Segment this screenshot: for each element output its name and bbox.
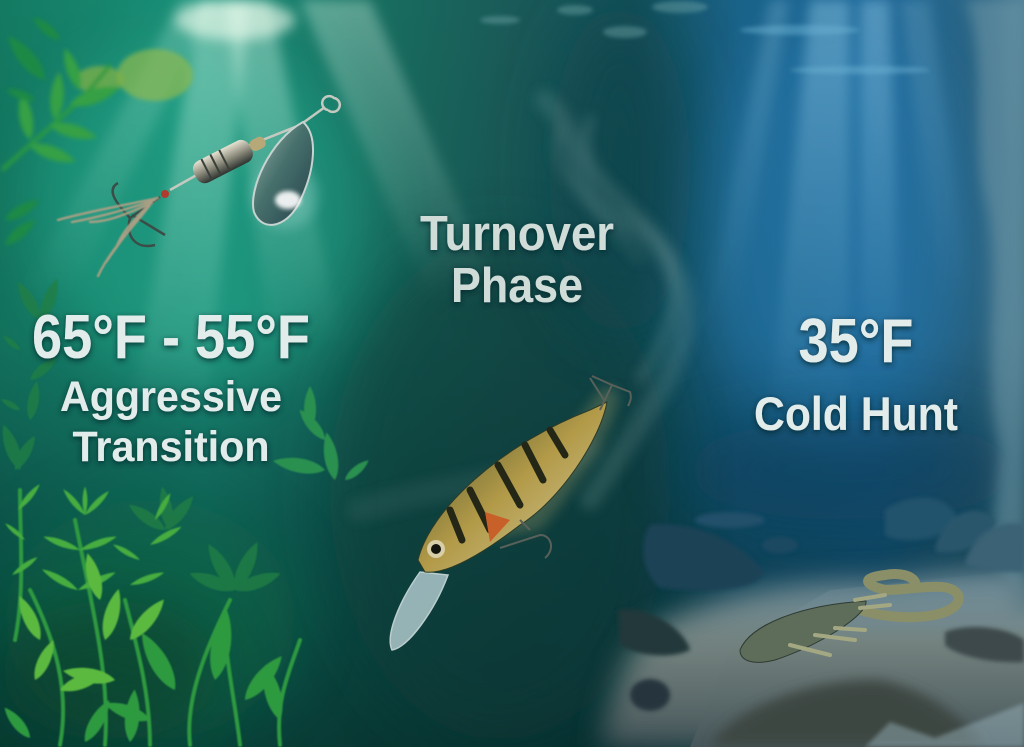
back leaves (0, 277, 283, 596)
rock: near rocks (618, 609, 690, 655)
seabed: sand and rocks (600, 498, 1024, 747)
surface ripples (480, 1, 930, 74)
spinner blade (253, 122, 313, 225)
segmented body (740, 601, 866, 662)
frost edge on right (965, 0, 1024, 600)
heading: Turnover Phase: Phase (451, 259, 583, 313)
water weed leaves by 310,440 (272, 386, 371, 483)
spinner glint (251, 161, 319, 229)
frost bottom (865, 703, 1024, 747)
plants: bottom-left aquatic vegetation (0, 277, 371, 745)
text: Aggressive Transition: Aggressive (60, 373, 282, 421)
wire and swivel (170, 96, 340, 190)
text: Cold Hunt: Cold Hunt (754, 387, 958, 440)
lure: perch crankbait (390, 376, 631, 650)
treble hook (113, 183, 165, 246)
heading: 65°F - 55°F: 65°F - 55°F (32, 303, 310, 372)
silt swirl cloud (360, 100, 685, 510)
light rays: left sunbeams (20, 0, 500, 420)
lure: soft plastic creature bait (740, 574, 959, 662)
sand base layer (690, 570, 1024, 747)
lure: silver spinner (58, 96, 340, 276)
bill (390, 572, 448, 650)
eye (427, 540, 445, 558)
plants: top-left leaves (2, 14, 193, 249)
bright leaves (4, 482, 183, 593)
dark sand mound (710, 680, 985, 747)
heading: Turnover Phase: Turnover (420, 207, 614, 261)
heading: Turnover Phase (420, 207, 614, 313)
orange fin (485, 512, 510, 542)
red bead (161, 190, 169, 198)
motion blur (490, 387, 618, 540)
body (418, 402, 607, 572)
hooks (590, 376, 631, 410)
feather tail (58, 198, 158, 276)
barrel body (190, 130, 270, 186)
text: Aggressive Transition: Transition (72, 423, 270, 471)
stripes (450, 430, 565, 540)
rock: back boulders (885, 498, 958, 540)
curly tail (860, 574, 959, 617)
rock: large boulder (643, 524, 764, 590)
heading: 35°F: 35°F (798, 307, 914, 376)
text: Aggressive Transition (60, 373, 282, 471)
bright stems (15, 490, 300, 745)
light rays: right sunbeams (700, 0, 970, 420)
yellow-green lit leaves (117, 49, 193, 101)
legs (790, 595, 890, 655)
